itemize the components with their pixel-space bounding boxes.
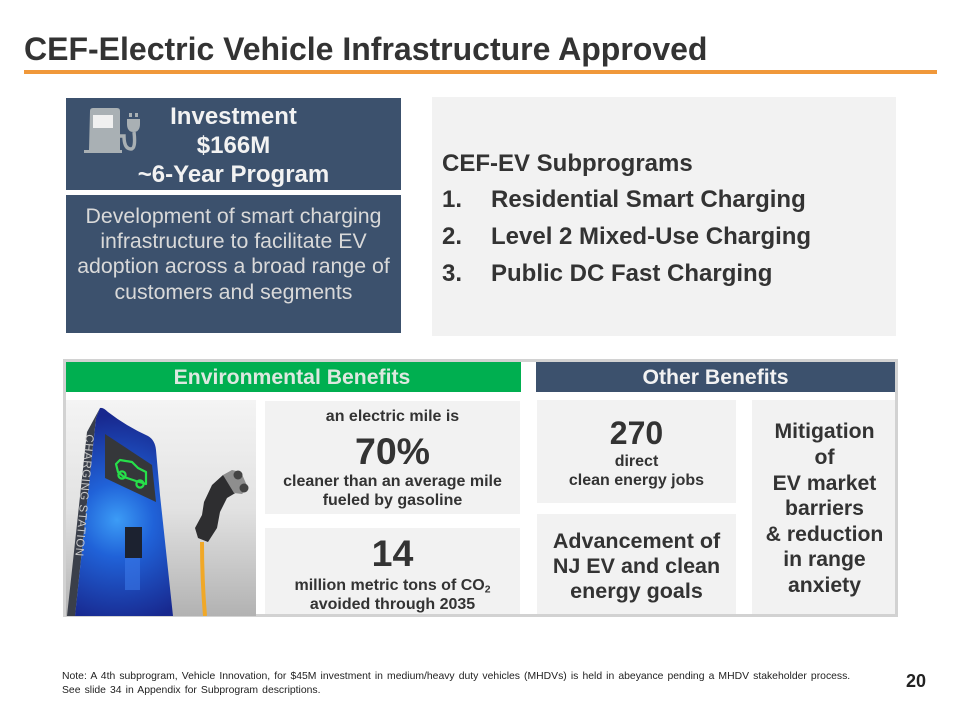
cable (202, 542, 205, 616)
kiosk front (75, 408, 173, 616)
card: mitigation (752, 400, 895, 614)
card: mitigation: & reduction (766, 523, 883, 546)
title: CEF-Electric Vehicle Infrastructure Approved (24, 31, 707, 67)
panel: subprograms: CEF-EV Subprograms (442, 150, 693, 177)
card: advancement: NJ EV and clean (553, 554, 720, 578)
card: 270 jobs (537, 400, 736, 503)
heading: other benefits: Other Benefits (642, 366, 788, 389)
footnote: See slide 34 in Appendix for Subprogram descriptions. (62, 684, 321, 696)
footnote (62, 671, 850, 696)
card: 70 percent cleaner: fueled by gasoline (323, 492, 462, 508)
panel: description (66, 195, 401, 333)
kiosk screen (105, 434, 156, 502)
footnote: Note: A 4th subprogram, Vehicle Innovation, for $45M investment in medium/heavy duty vehicles (MHDVs) is held in abeyance pending a MHDV stakeholder process. (62, 671, 850, 682)
car glyph (116, 460, 146, 488)
card: advancement: energy goals (570, 579, 703, 603)
panel: description: customers and segments (115, 280, 352, 304)
card: 270 jobs: 270 (610, 415, 663, 451)
card: mitigation: EV market (773, 472, 876, 495)
panel: subprograms: 3. (442, 260, 462, 287)
title rule (24, 70, 937, 74)
card: 14 million tons: million metric tons of CO2 (294, 577, 490, 596)
investment text: Investment (170, 103, 297, 130)
investment text (138, 103, 329, 188)
kiosk side (67, 408, 100, 616)
card: mitigation: in range (783, 548, 866, 571)
socket (125, 527, 142, 558)
panel: subprograms: Level 2 Mixed-Use Charging (491, 223, 811, 250)
card: mitigation: barriers (785, 497, 864, 520)
card: 14 million tons: 14 (372, 532, 413, 574)
panel: subprograms: 2. (442, 223, 462, 250)
connector (195, 475, 237, 542)
card: 70 percent cleaner: an electric mile is (326, 408, 459, 424)
card: mitigation: of (814, 446, 834, 469)
panel: subprograms: Public DC Fast Charging (491, 260, 772, 287)
card: mitigation: Mitigation (774, 420, 875, 443)
card: mitigation: anxiety (788, 574, 861, 597)
card: 70 percent cleaner (265, 401, 520, 514)
card: 70 percent cleaner: 70% (355, 430, 430, 472)
benefits frame (63, 359, 898, 617)
card: 14 million tons (265, 528, 520, 614)
investment text: ~6-Year Program (138, 161, 329, 188)
card: 14 million tons: avoided through 2035 (310, 596, 475, 612)
investment text: $166M (197, 132, 270, 158)
card: 270 jobs: direct (615, 452, 658, 470)
page number: 20 (906, 671, 926, 691)
heading: environmental benefits (66, 362, 521, 392)
card: 270 jobs: clean energy jobs (569, 472, 704, 489)
kiosk side label: CHARGING STATION (72, 434, 95, 557)
heading: other benefits (536, 362, 895, 392)
card: 70 percent cleaner: cleaner than an average mile (283, 472, 502, 490)
panel: subprograms: 1. (442, 186, 462, 213)
photo: charging station (66, 400, 256, 616)
card: advancement: Advancement of (553, 528, 720, 552)
icon: charging pump (84, 108, 140, 153)
panel: description: adoption across a broad range of (77, 254, 390, 278)
panel: description: Development of smart charging (86, 204, 381, 228)
panel: subprograms: Residential Smart Charging (491, 186, 806, 213)
card: advancement (537, 514, 736, 614)
heading: environmental benefits: Environmental Benefits (174, 366, 410, 389)
panel: investment (66, 98, 401, 190)
panel: subprograms (432, 97, 896, 336)
panel: description: infrastructure to facilitate EV (100, 229, 367, 253)
